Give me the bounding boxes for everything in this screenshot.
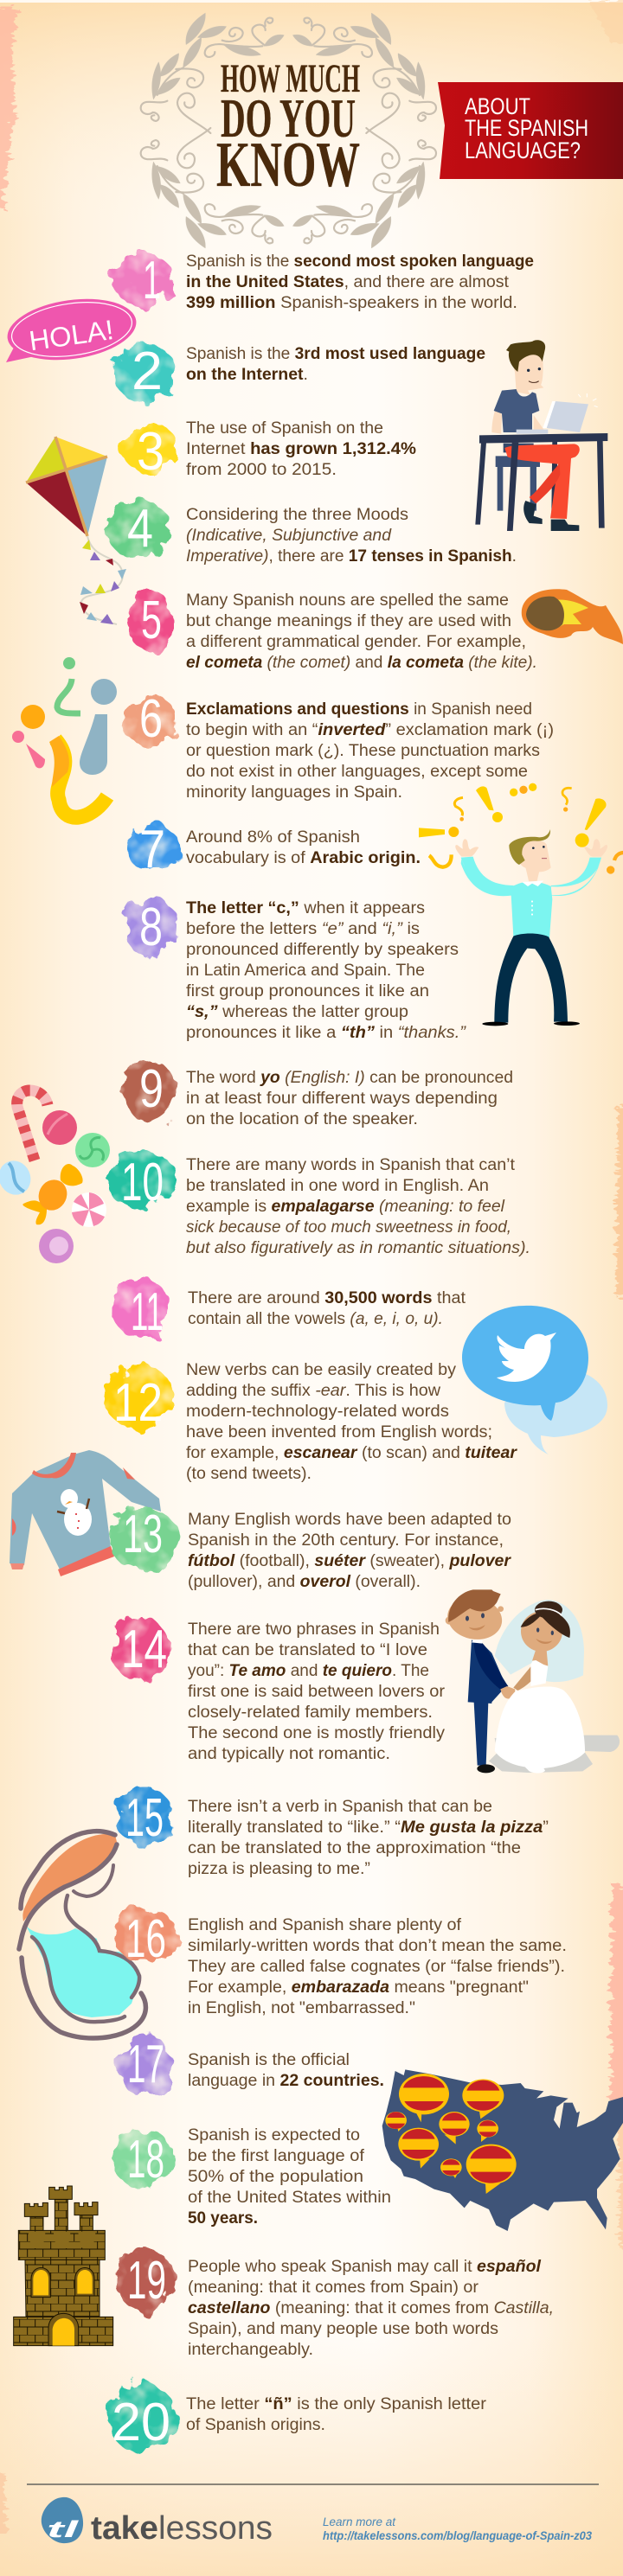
- text 1: Spanish is the second most spoken language: [186, 252, 534, 271]
- badge 12: 12: [113, 1373, 163, 1433]
- text 8: The letter “c,” when it appears: [186, 899, 425, 917]
- text 19: castellano (meaning: that it comes from Castilla,: [188, 2299, 554, 2317]
- text 10: example is empalagarse (meaning: to feel: [186, 1198, 505, 1216]
- badge 3: [120, 422, 177, 482]
- text 4: Considering the three Moods: [186, 506, 408, 524]
- text 2: Spanish is the 3rd most used language: [186, 345, 485, 363]
- red ribbon subtitle: THE SPANISH: [465, 115, 588, 141]
- fact 2: [113, 342, 485, 402]
- text 16: For example, embarazada means "pregnant": [188, 1978, 529, 1997]
- badge 7: 7: [139, 820, 165, 879]
- text 3: from 2000 to 2015.: [186, 461, 337, 479]
- title: [216, 56, 360, 201]
- text 17: [188, 2051, 384, 2090]
- text 12: modern-technology-related words: [186, 1403, 449, 1421]
- red ribbon subtitle: ABOUT: [465, 93, 530, 119]
- fact 20: [107, 2383, 487, 2452]
- illustration: pregnant woman: [19, 1831, 145, 2038]
- badge 13: 13: [123, 1505, 163, 1564]
- text 3: [186, 419, 416, 479]
- text 12: have been invented from English words;: [186, 1423, 492, 1441]
- text 8: first group pronounces it like an: [186, 982, 429, 1000]
- text 19: Spain), and many people use both words: [188, 2320, 498, 2338]
- text 11: [188, 1289, 466, 1328]
- text 5: but change meanings if they are used with: [186, 612, 511, 630]
- text 13: (pullover), and overol (overall).: [188, 1573, 421, 1591]
- text 10: but also figuratively as in romantic situations).: [186, 1239, 530, 1257]
- title: KNOW: [216, 130, 360, 201]
- text 12: [186, 1361, 518, 1483]
- text 16: similarly-written words that don’t mean the same.: [188, 1937, 567, 1955]
- text 17: Spanish is the official: [188, 2051, 350, 2069]
- text 6: minority languages in Spain.: [186, 783, 402, 802]
- badge 17: 17: [127, 2035, 164, 2094]
- text 19: [188, 2258, 554, 2359]
- footer logo: takelessons: [42, 2497, 273, 2547]
- text 2: on the Internet.: [186, 366, 308, 384]
- text 14: that can be translated to “I love: [188, 1641, 427, 1659]
- fact 12: [103, 1361, 518, 1483]
- speech bubble: hola: HOLA!: [27, 314, 115, 356]
- text 14: The second one is mostly friendly: [188, 1724, 446, 1742]
- badge 3: 3: [137, 422, 164, 482]
- text 14: first one is said between lovers or: [188, 1683, 446, 1701]
- badge 7: [126, 820, 178, 879]
- fact 14: [112, 1617, 446, 1763]
- text 18: [188, 2126, 391, 2228]
- badge 18: 18: [127, 2130, 164, 2189]
- badge 5: [129, 589, 172, 653]
- fact 1: [112, 251, 534, 312]
- text 1: 399 million Spanish-speakers in the world.: [186, 294, 517, 312]
- badge 14: [112, 1617, 170, 1683]
- text 3: The use of Spanish on the: [186, 419, 383, 438]
- footer link: Learn more at: [323, 2515, 396, 2528]
- text 2: [186, 345, 485, 384]
- badge 16: 16: [125, 1909, 166, 1969]
- text 1: in the United States , and there are almost: [186, 273, 510, 291]
- text 11: contain all the vowels (a, e, i, o, u).: [188, 1310, 443, 1328]
- text 18: of the United States within: [188, 2189, 391, 2207]
- flag pin 8: [466, 2145, 517, 2194]
- title: DO YOU: [221, 88, 356, 149]
- text 13: Many English words have been adapted to: [188, 1511, 511, 1529]
- text 13: Spanish in the 20th century. For instance,: [188, 1531, 504, 1550]
- flag pin 2: [462, 2079, 504, 2119]
- fact 3: [120, 419, 416, 482]
- text 16: in English, not "embarrassed.": [188, 1999, 415, 2017]
- badge 13: [109, 1505, 178, 1571]
- illustration: candy: [0, 1090, 110, 1263]
- text 5: Many Spanish nouns are spelled the same: [186, 591, 509, 610]
- text 14: [188, 1620, 446, 1763]
- illustration: twitter speech bubbles: [462, 1306, 607, 1454]
- illustration: wedding couple: [444, 1589, 620, 1774]
- badge 1: 1: [143, 251, 161, 310]
- fact 10: [106, 1152, 530, 1257]
- text 9: The word yo (English: I) can be pronounced: [186, 1069, 513, 1087]
- text 18: be the first language of: [188, 2147, 365, 2165]
- text 11: There are around 30,500 words that: [188, 1289, 466, 1307]
- text 19: (meaning: that it comes from Spain) or: [188, 2279, 479, 2297]
- text 14: you”: Te amo and te quiero. The: [188, 1662, 429, 1680]
- badge 19: [117, 2250, 176, 2312]
- text 7: [186, 828, 421, 867]
- badge 17: [117, 2034, 172, 2096]
- text 4: Imperative), there are 17 tenses in Spanish.: [186, 547, 517, 566]
- fact 6: [121, 689, 554, 802]
- footer logo: takelessons: tl: [47, 2516, 79, 2542]
- badge 15: 15: [125, 1788, 164, 1848]
- text 19: People who speak Spanish may call it español: [188, 2258, 542, 2276]
- text 5: a different grammatical gender. For example,: [186, 633, 526, 651]
- text 9: [186, 1069, 513, 1128]
- text 6: to begin with an “ inverted” exclamation mark (¡): [186, 721, 554, 739]
- text 6: [186, 700, 554, 802]
- text 18: 50 years.: [188, 2209, 258, 2228]
- illustration: snowman sweater: [10, 1450, 161, 1576]
- fact 18: [112, 2126, 391, 2228]
- illustration: castle: [14, 2186, 113, 2346]
- badge 8: [125, 896, 177, 958]
- badge 11: [112, 1276, 168, 1342]
- text 14: There are two phrases in Spanish: [188, 1620, 440, 1639]
- badge 19: 19: [127, 2251, 166, 2311]
- text 20: of Spanish origins.: [186, 2416, 325, 2434]
- text 14: closely-related family members.: [188, 1703, 433, 1722]
- text 15: literally translated to “like.” “ Me gusta la pizza ”: [188, 1819, 549, 1837]
- text 1: [186, 252, 534, 312]
- fact 13: [109, 1505, 512, 1591]
- badge 1: [112, 251, 175, 310]
- text 4: [186, 506, 517, 566]
- text 15: [188, 1798, 549, 1878]
- text 8: “s,” whereas the latter group: [186, 1003, 408, 1021]
- text 10: be translated in one word in English. An: [186, 1177, 489, 1195]
- text 6: or question mark (¿). These punctuation marks: [186, 742, 540, 760]
- illustration: comet: [522, 589, 623, 644]
- flag pin 1: [399, 2074, 449, 2122]
- illustration: USA map with flag pins: [382, 2069, 623, 2231]
- footer link: http://takelessons.com/blog/language-of-Spain-z03: [323, 2528, 592, 2542]
- fact 4: [106, 499, 517, 566]
- badge 9: 9: [139, 1059, 164, 1119]
- fact 5: [129, 589, 537, 672]
- text 16: They are called false cognates (or “false friends”).: [188, 1958, 565, 1976]
- badge 4: 4: [127, 499, 153, 559]
- flag pin 5: [477, 2120, 498, 2142]
- fact 15: [114, 1787, 549, 1878]
- illustration: inverted punctuation marks: [12, 657, 117, 817]
- text 13: [188, 1511, 512, 1591]
- text 12: adding the suffix -ear. This is how: [186, 1382, 440, 1400]
- flag pin 7: [440, 2158, 462, 2178]
- badge 4: [106, 499, 171, 559]
- text 12: for example, escanear (to scan) and tuitear: [186, 1444, 518, 1462]
- badge 11: 11: [131, 1282, 164, 1342]
- text 20: The letter “ñ” is the only Spanish letter: [186, 2395, 487, 2413]
- text 5: [186, 591, 537, 672]
- red ribbon subtitle: [438, 82, 623, 179]
- text 8: pronounced differently by speakers: [186, 941, 459, 959]
- text 8: before the letters “e” and “i,” is: [186, 920, 420, 938]
- text 8: in Latin America and Spain. The: [186, 962, 425, 980]
- text 12: (to send tweets).: [186, 1465, 312, 1483]
- text 8: pronounces it like a “th” in “thanks.”: [186, 1024, 467, 1042]
- fact 17: [117, 2034, 384, 2096]
- text 18: Spanish is expected to: [188, 2126, 360, 2145]
- text 15: can be translated to the approximation “the: [188, 1839, 521, 1857]
- text 9: in at least four different ways depending: [186, 1090, 498, 1108]
- badge 6: [121, 689, 177, 749]
- illustration: man at laptop: [475, 340, 607, 531]
- badge 8: 8: [139, 898, 163, 957]
- badge 10: 10: [121, 1153, 164, 1212]
- text 14: and typically not romantic.: [188, 1745, 390, 1763]
- badge 18: [112, 2129, 174, 2189]
- badge 20: 20: [112, 2393, 170, 2452]
- badge 9: [124, 1059, 176, 1122]
- fact 7: [126, 820, 421, 879]
- title ornament wreath: [141, 13, 436, 248]
- badge 6: 6: [139, 689, 163, 749]
- badge 2: [113, 342, 176, 402]
- text 13: fútbol (football), suéter (sweater), pulover: [188, 1552, 512, 1570]
- text 4: (Indicative, Subjunctive and: [186, 527, 392, 545]
- text 9: on the location of the speaker.: [186, 1110, 418, 1128]
- text 18: 50% of the population: [188, 2168, 363, 2186]
- badge 2: 2: [132, 342, 163, 401]
- fact 9: [124, 1059, 513, 1128]
- text 8: [186, 899, 467, 1042]
- text 15: pizza is pleasing to me.”: [188, 1860, 370, 1878]
- badge 15: [114, 1787, 173, 1848]
- red ribbon subtitle: LANGUAGE?: [465, 137, 581, 163]
- title: HOW MUCH: [221, 56, 360, 101]
- fact 8: [125, 896, 467, 1042]
- text 20: [186, 2395, 487, 2434]
- badge 14: 14: [121, 1620, 167, 1679]
- fact 19: [117, 2250, 554, 2359]
- text 7: Around 8% of Spanish: [186, 828, 360, 847]
- text 6: do not exist in other languages, except some: [186, 763, 528, 781]
- speech bubble: hola: [3, 291, 140, 368]
- fact 16: [114, 1908, 567, 2017]
- text 10: sick because of too much sweetness in food,: [186, 1218, 511, 1237]
- badge 5: 5: [141, 591, 162, 650]
- text 16: [188, 1916, 567, 2017]
- flag pin 3: [385, 2112, 407, 2132]
- text 5: el cometa (the comet) and la cometa (the kite).: [186, 654, 537, 672]
- footer logo: takelessons: takelessons: [91, 2510, 273, 2547]
- text 7: vocabulary is of Arabic origin.: [186, 849, 421, 867]
- footer link: [323, 2515, 592, 2542]
- text 17: language in 22 countries.: [188, 2072, 384, 2090]
- text 6: Exclamations and questions in Spanish need: [186, 700, 532, 719]
- text 16: English and Spanish share plenty of: [188, 1916, 462, 1934]
- text 15: There isn’t a verb in Spanish that can be: [188, 1798, 492, 1816]
- fact 11: [112, 1276, 466, 1342]
- text 10: There are many words in Spanish that can’t: [186, 1156, 516, 1174]
- flag pin 6: [398, 2128, 439, 2169]
- text 10: [186, 1156, 530, 1257]
- illustration: kite: [26, 437, 126, 624]
- text 3: Internet has grown 1,312.4%: [186, 440, 416, 458]
- illustration: confused man with punctuation: [419, 783, 623, 1026]
- flag pin 4: [439, 2112, 470, 2145]
- text 12: New verbs can be easily created by: [186, 1361, 457, 1379]
- text 19: interchangeably.: [188, 2341, 313, 2359]
